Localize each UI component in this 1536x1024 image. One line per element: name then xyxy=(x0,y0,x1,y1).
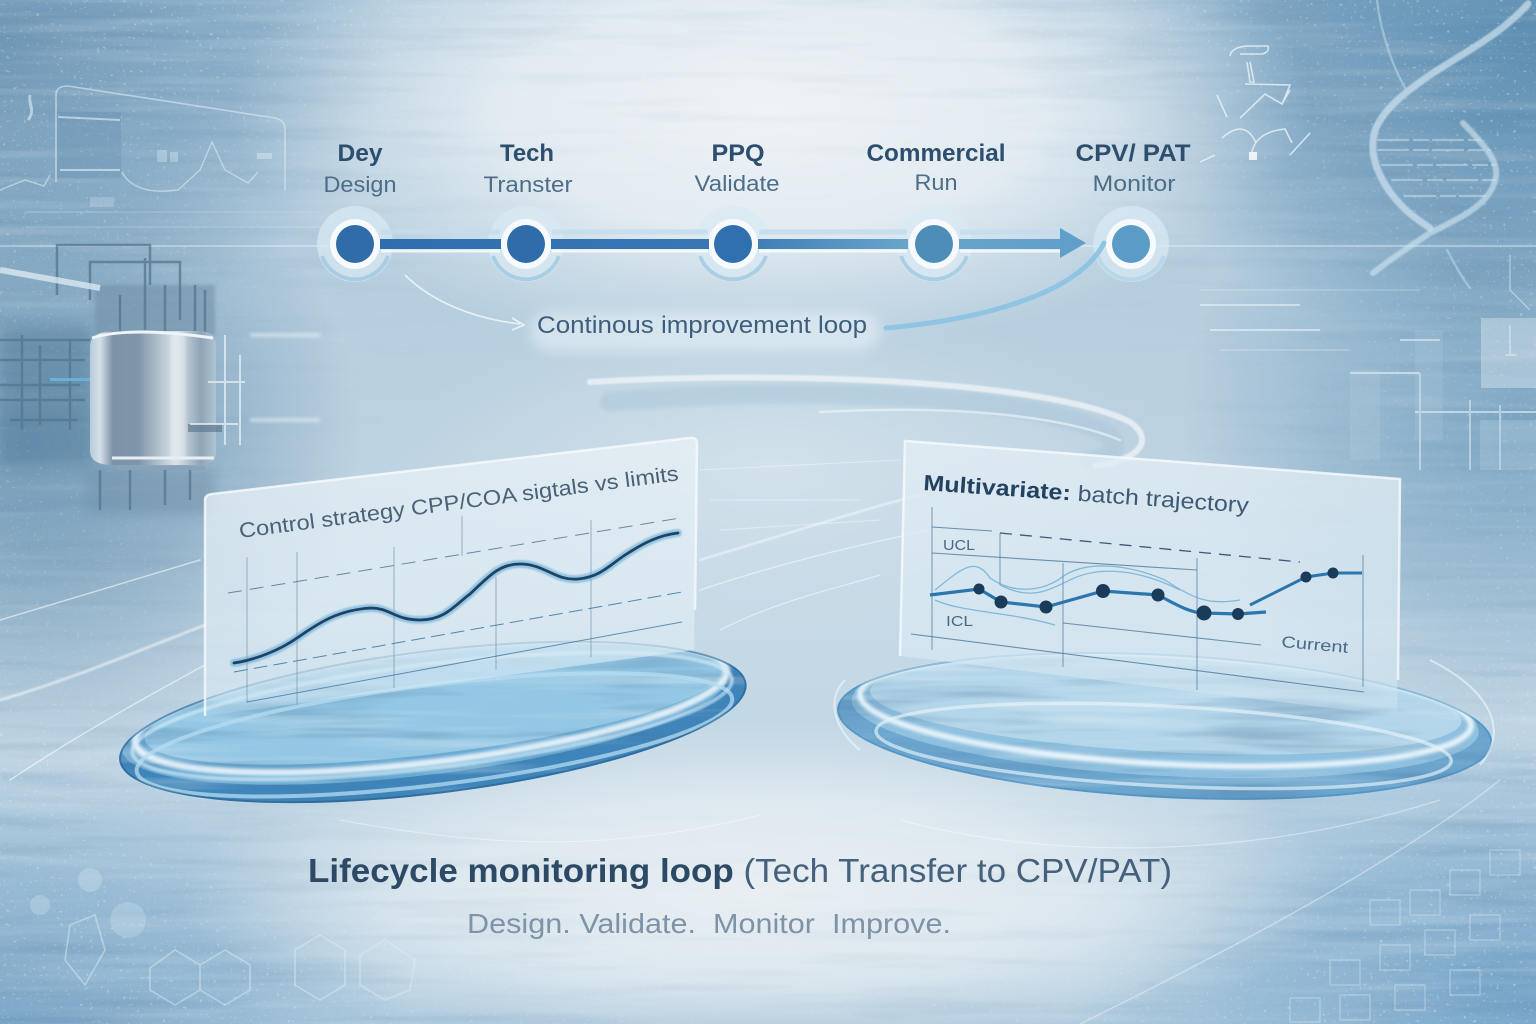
glass panel xyxy=(205,438,697,716)
signal line xyxy=(234,533,678,663)
node: PPQ xyxy=(694,140,780,282)
node: Tech: Transter xyxy=(484,172,572,197)
decorative hexagon network, bottom left xyxy=(30,868,415,1005)
node: Commercial xyxy=(866,140,1006,282)
node: Dev: Design xyxy=(324,172,396,197)
title: Lifecycle monitoring loop (Tech Transfer to CPV/PAT) xyxy=(308,852,1172,889)
decorative central swirl xyxy=(590,378,1142,466)
callout: continuous improvement loop: Continous improvement loop xyxy=(537,312,867,339)
glass panel xyxy=(900,441,1400,716)
timeline: lifecycle stages xyxy=(317,140,1191,282)
trajectory line and points xyxy=(930,568,1362,620)
decorative equipment, right side xyxy=(1200,255,1536,470)
node: CPV / PAT: CPV/ PAT xyxy=(1076,140,1191,167)
connector bar with arrow xyxy=(380,228,1086,258)
chart title: Control strategy CPP/COA sigtals vs limits xyxy=(238,462,680,543)
node: CPV / PAT xyxy=(1076,140,1191,282)
decorative key grid, bottom right xyxy=(1290,850,1520,1022)
trajectory bands xyxy=(935,566,1240,625)
platform ring xyxy=(834,652,1495,800)
icon: bioreactor vessel and pipework xyxy=(0,245,320,515)
node: Dev xyxy=(317,140,396,282)
icon: DNA helix xyxy=(1373,0,1528,288)
panel: multivariate chart on platform xyxy=(830,441,1500,815)
node: Tech xyxy=(484,140,572,282)
label: UCL: UCL xyxy=(943,537,975,554)
chart title: Multivariate: batch trajectory xyxy=(923,470,1250,518)
node: CPV / PAT: Monitor xyxy=(1092,171,1176,196)
panel: control strategy chart on platform xyxy=(119,436,747,804)
label: LCL: ICL xyxy=(946,613,973,630)
subtitle: Design. Validate. Monitor Improve. xyxy=(467,908,951,939)
label: current: Current xyxy=(1281,634,1350,657)
decorative data dashboard, top left xyxy=(0,86,320,227)
node: Commercial: Commercial xyxy=(866,140,1006,167)
platform ring xyxy=(119,640,747,804)
node: Commercial: Run xyxy=(914,170,958,195)
node: PPQ: Validate xyxy=(694,171,780,196)
chart grid and limits xyxy=(911,507,1364,692)
node: PPQ: PPQ xyxy=(712,140,764,167)
icon: molecular diagram xyxy=(1200,46,1310,162)
node: Tech: Tech xyxy=(500,140,554,167)
callout: continuous improvement loop xyxy=(405,243,1104,352)
chart grid and limits xyxy=(228,516,682,705)
node: Dev: Dey xyxy=(338,140,383,167)
